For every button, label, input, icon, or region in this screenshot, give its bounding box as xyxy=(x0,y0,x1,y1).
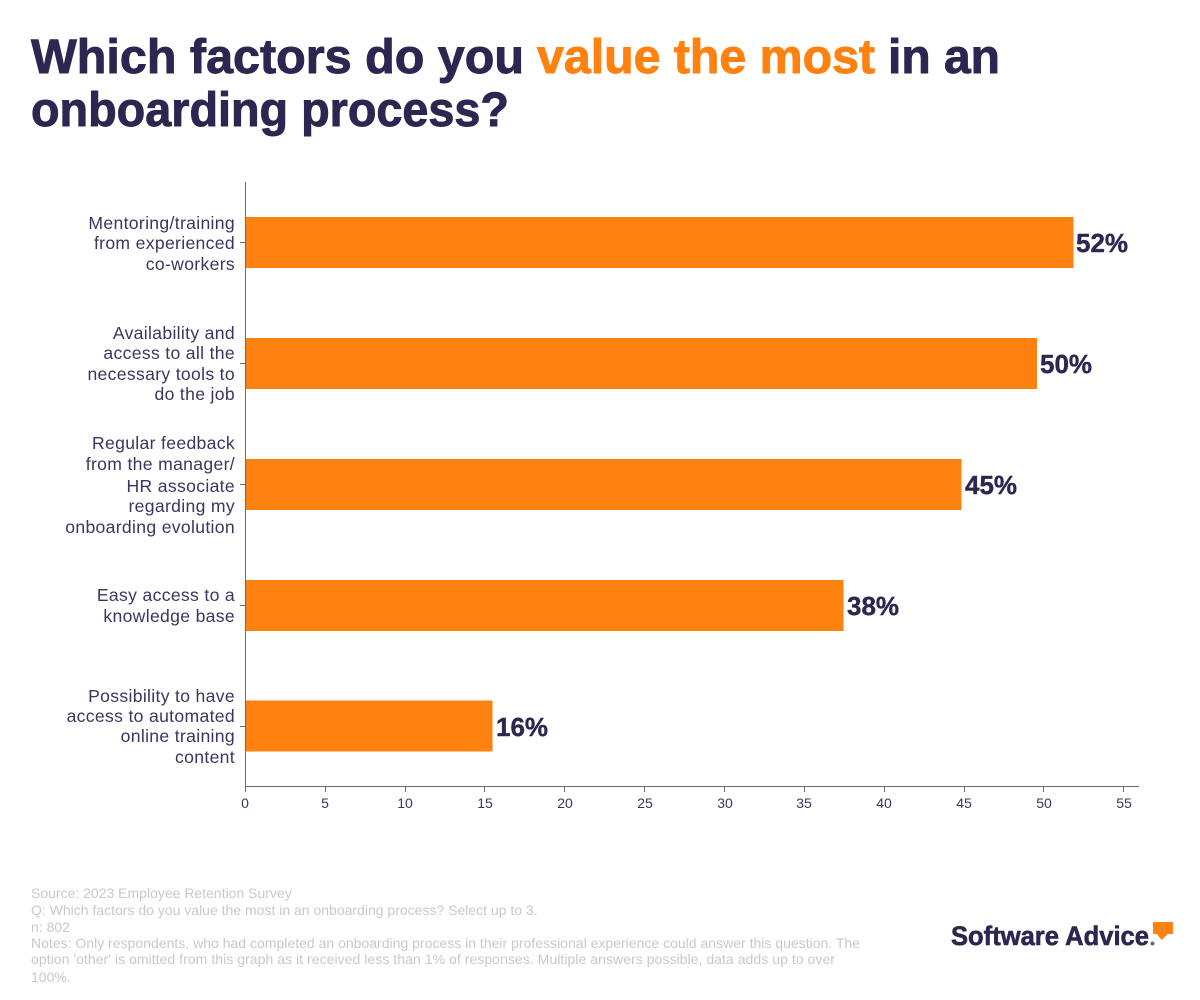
category labels: Availability and xyxy=(113,323,235,343)
footnotes: 100%. xyxy=(31,969,71,985)
axis tick labels: 55 xyxy=(1116,795,1132,811)
category labels: from the manager/ xyxy=(86,454,235,474)
axis tick labels xyxy=(241,795,1132,811)
value labels: 45% xyxy=(965,472,1017,500)
axis tick labels: 0 xyxy=(241,795,249,811)
title: value the most xyxy=(537,31,875,84)
axis tick labels: 35 xyxy=(796,795,812,811)
axes xyxy=(240,182,1139,792)
value labels xyxy=(496,230,1128,742)
axis tick labels: 5 xyxy=(321,795,329,811)
bar chart xyxy=(65,182,1139,811)
axis tick labels: 15 xyxy=(477,795,493,811)
category labels: access to all the xyxy=(103,343,235,363)
bars xyxy=(246,217,1074,752)
category labels: HR associate xyxy=(127,476,235,496)
category labels: online training xyxy=(121,726,235,746)
category labels: Easy access to a xyxy=(97,585,235,605)
axis tick labels: 50 xyxy=(1036,795,1052,811)
category labels: do the job xyxy=(155,384,235,404)
value labels: 38% xyxy=(847,593,899,621)
axis tick labels: 20 xyxy=(557,795,573,811)
axis tick labels: 30 xyxy=(717,795,733,811)
value labels: 50% xyxy=(1040,351,1092,379)
category labels: necessary tools to xyxy=(87,364,235,384)
category labels: co-workers xyxy=(146,254,235,274)
category labels: from experienced xyxy=(94,233,235,253)
footnotes: n: 802 xyxy=(31,919,70,935)
category labels: access to automated xyxy=(67,706,235,726)
axis tick labels: 10 xyxy=(397,795,413,811)
category labels: Regular feedback xyxy=(92,433,235,453)
category labels: content xyxy=(175,747,235,767)
logo: Software Advice: Software Advice xyxy=(951,921,1149,951)
icon: speech bubble xyxy=(1153,922,1173,940)
category labels xyxy=(65,213,235,767)
footnotes: option 'other' is omitted from this graph as it received less than 1% of responses. Multiple answers possible, data adds up to over xyxy=(31,951,835,967)
axis tick labels: 45 xyxy=(956,795,972,811)
category labels: onboarding evolution xyxy=(65,517,235,537)
footnotes: Source: 2023 Employee Retention Survey xyxy=(31,885,292,901)
title: in an xyxy=(888,31,1000,84)
value labels: 16% xyxy=(496,714,548,742)
category labels: knowledge base xyxy=(103,606,235,626)
footnotes xyxy=(31,885,860,985)
title xyxy=(31,31,1000,137)
category labels: regarding my xyxy=(128,496,235,516)
title: Which factors do you xyxy=(31,31,524,84)
title: onboarding process? xyxy=(31,84,509,137)
axis tick labels: 25 xyxy=(637,795,653,811)
footnotes: Notes: Only respondents, who had completed an onboarding process in their professional experience could answer this question. The xyxy=(31,935,860,951)
category labels: Mentoring/training xyxy=(88,213,235,233)
axis tick labels: 40 xyxy=(876,795,892,811)
value labels: 52% xyxy=(1076,230,1128,258)
footnotes: Q: Which factors do you value the most in an onboarding process? Select up to 3. xyxy=(31,902,538,918)
category labels: Possibility to have xyxy=(88,686,235,706)
